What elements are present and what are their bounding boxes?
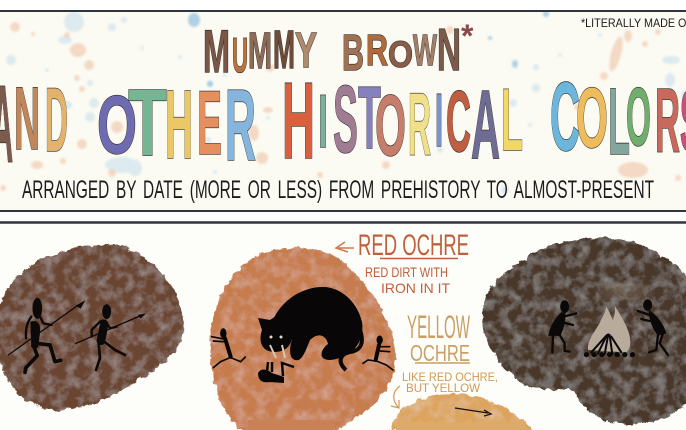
title: AND OTHER HISTORICAL COLORS: L — [501, 71, 523, 170]
title: AND OTHER HISTORICAL COLORS: R — [408, 75, 431, 175]
blob bottom edge fill — [396, 422, 526, 430]
sabertooth cat — [258, 287, 362, 370]
title: MUMMY BROWN: W — [413, 26, 437, 75]
banner border — [0, 11, 686, 211]
panel: title banner — [0, 10, 686, 212]
title: AND OTHER HISTORICAL COLORS: E — [197, 72, 222, 174]
label: red ochre: IRON IN IT — [381, 280, 450, 296]
title: AND OTHER HISTORICAL COLORS: A — [471, 70, 500, 179]
title: AND OTHER HISTORICAL COLORS: O — [375, 78, 406, 174]
title: AND OTHER HISTORICAL COLORS: T — [358, 70, 381, 168]
title: AND OTHER HISTORICAL COLORS: C — [550, 62, 580, 171]
title: MUMMY BROWN: R — [366, 27, 388, 75]
label: red ochre: RED OCHRE — [358, 229, 469, 262]
title: AND OTHER HISTORICAL COLORS: S — [333, 66, 358, 173]
title: AND OTHER HISTORICAL COLORS: R — [655, 70, 680, 172]
label: red ochre — [334, 234, 468, 293]
title: AND OTHER HISTORICAL COLORS — [0, 81, 686, 162]
label: yellow ochre: BUT YELLOW — [406, 381, 481, 395]
fire and people — [548, 299, 668, 355]
label: red ochre: RED DIRT WITH — [365, 264, 448, 280]
title: AND OTHER HISTORICAL COLORS: I — [435, 79, 443, 163]
running figure left — [212, 328, 245, 368]
blob bottom edge fill — [248, 420, 334, 430]
orange blob: red ochre — [210, 248, 396, 430]
title: AND OTHER HISTORICAL COLORS: N — [14, 69, 40, 169]
title: AND OTHER HISTORICAL COLORS: C — [446, 72, 471, 169]
title: AND OTHER HISTORICAL COLORS: I — [318, 79, 328, 164]
label: yellow ochre: YELLOW — [407, 309, 470, 345]
title: AND OTHER HISTORICAL COLORS: T — [128, 71, 167, 176]
title: MUMMY BROWN: B — [342, 24, 364, 81]
label: yellow ochre — [391, 309, 498, 408]
title: AND OTHER HISTORICAL COLORS: R — [225, 68, 256, 182]
title: MUMMY BROWN: U — [232, 28, 248, 84]
brown blob — [0, 245, 183, 410]
title: AND OTHER HISTORICAL COLORS: O — [97, 79, 137, 171]
label: yellow ochre: OCHRE — [410, 340, 470, 366]
title: AND OTHER HISTORICAL COLORS: O — [576, 72, 608, 166]
hunter figures — [8, 298, 146, 372]
label: yellow ochre: LIKE RED OCHRE, — [402, 370, 498, 384]
title: AND OTHER HISTORICAL COLORS: O — [626, 71, 651, 163]
dark brown blob — [482, 238, 686, 424]
divider — [0, 221, 686, 224]
title: MUMMY BROWN: Y — [295, 22, 317, 78]
asterisk: * — [461, 18, 474, 54]
sabertooth fangs and eyes — [270, 336, 285, 358]
panel: prehistory — [0, 222, 686, 430]
title: MUMMY BROWN — [204, 28, 460, 74]
cave painting: sabertooth cat — [210, 248, 396, 430]
title: AND OTHER HISTORICAL COLORS: H — [165, 70, 193, 179]
watercolor splatter — [0, 11, 686, 194]
cave painting: hunters — [0, 245, 183, 410]
title: MUMMY BROWN: M — [273, 20, 295, 79]
prey figure — [258, 362, 294, 383]
title: MUMMY BROWN: N — [437, 18, 461, 84]
title: MUMMY BROWN: O — [388, 35, 413, 76]
title: AND OTHER HISTORICAL COLORS: H — [282, 60, 315, 181]
arrow to orange blob — [336, 242, 354, 252]
title: AND OTHER HISTORICAL COLORS: D — [45, 71, 68, 171]
title: AND OTHER HISTORICAL COLORS: L — [608, 69, 630, 175]
yellow ochre blob — [391, 394, 533, 430]
curved arrow to yellow blob — [391, 386, 400, 408]
black arrow mark — [455, 408, 491, 416]
pale wash patch — [600, 285, 650, 299]
title: MUMMY BROWN: M — [203, 18, 230, 86]
title: MUMMY BROWN: M — [248, 22, 272, 79]
running figure right — [363, 336, 393, 370]
cave painting: campfire — [482, 238, 686, 424]
